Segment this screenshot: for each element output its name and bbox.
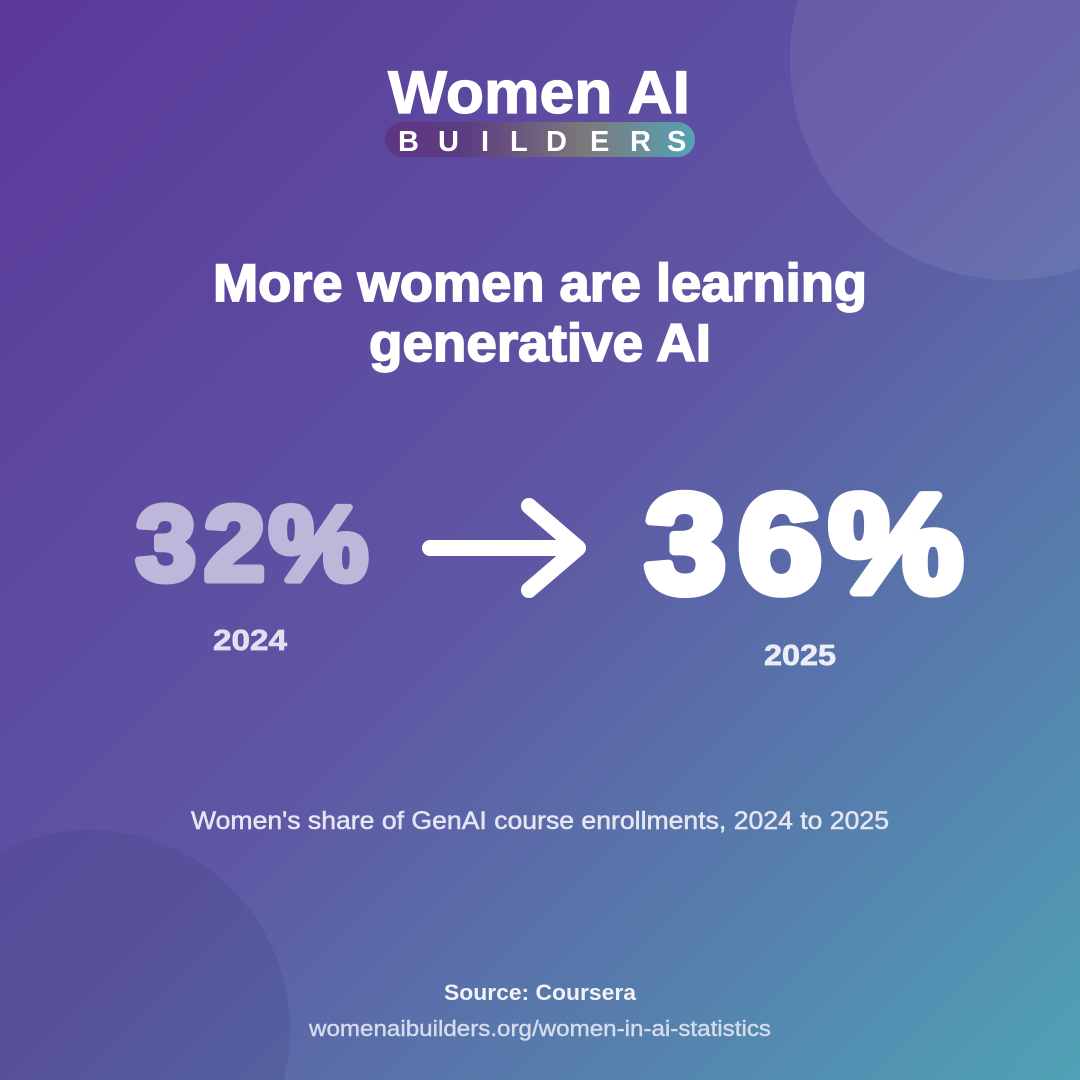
value 32% [136, 485, 368, 603]
value 32%: 2 [204, 485, 265, 603]
logo [385, 59, 695, 158]
title [213, 254, 867, 373]
logo badge: BUILDERS [398, 126, 686, 158]
value 36%: 3 [645, 465, 726, 622]
stat: 2024 [136, 485, 368, 657]
label 2025: 2025 [764, 640, 836, 672]
value 36%: 6 [738, 465, 822, 622]
logo wordmark: Women AI [388, 59, 690, 126]
decorative circle: bottom left [0, 830, 290, 1080]
decorative circle: top right [790, 0, 1080, 280]
title: generative AI [369, 314, 711, 373]
stat: 2025 [645, 465, 963, 672]
value 36% [645, 465, 963, 622]
description: Women's share of GenAI course enrollments, 2024 to 2025 [191, 807, 889, 835]
website url: womenaibuilders.org/women-in-ai-statistics [308, 1016, 771, 1041]
value 36%: % [829, 465, 963, 622]
arrow [430, 506, 578, 590]
label 2024: 2024 [213, 625, 287, 657]
value 32%: % [269, 485, 368, 603]
value 32%: 3 [136, 485, 196, 603]
title: More women are learning [213, 254, 867, 313]
source: Source: Coursera [444, 980, 637, 1005]
